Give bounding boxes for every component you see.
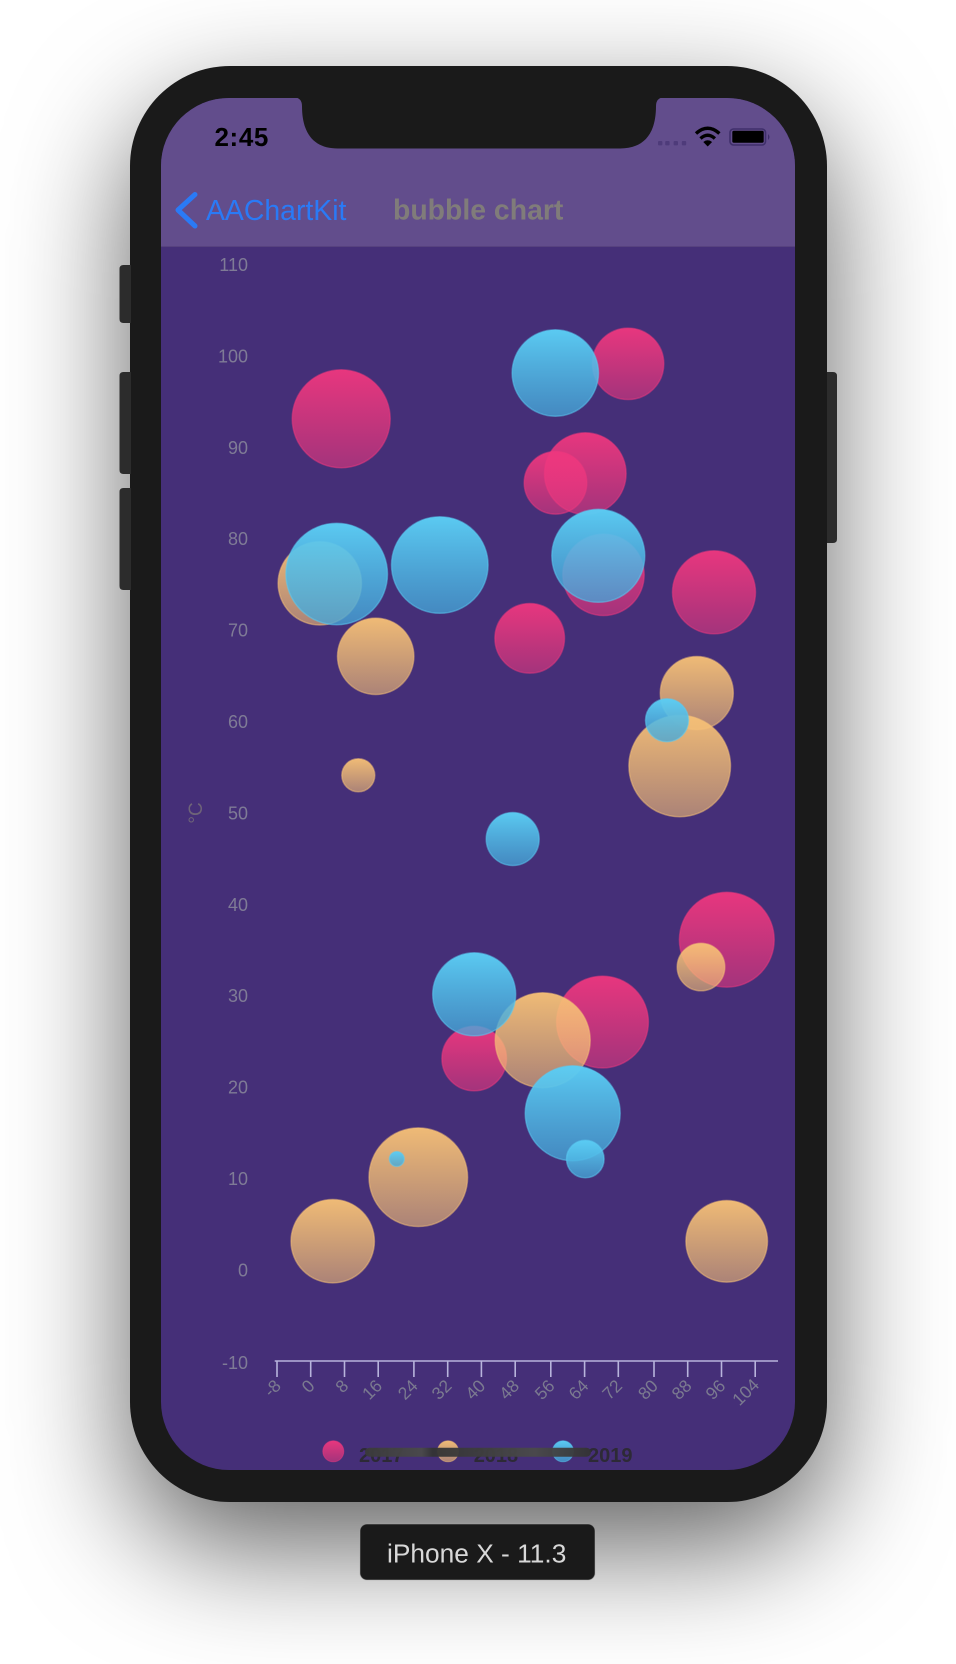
y axis labels: 110: [219, 255, 248, 275]
y axis labels: 100: [218, 346, 248, 366]
y axis labels: [218, 255, 248, 1373]
x axis labels: 32: [428, 1376, 456, 1404]
x axis labels: 72: [598, 1376, 626, 1404]
x axis labels: 96: [701, 1376, 729, 1404]
status time: 2:45: [214, 122, 269, 152]
x axis labels: 56: [531, 1376, 559, 1404]
legend item 2018: 2018: [474, 1445, 518, 1467]
legend item 2018: [438, 1440, 518, 1462]
notch: [294, 97, 664, 148]
x axis labels: 24: [394, 1375, 422, 1404]
bubble series 2017: [292, 328, 774, 1091]
device body with shadow: [130, 66, 827, 1502]
device label: iPhone X - 11.3: [387, 1539, 566, 1569]
y axis labels: 40: [228, 895, 248, 915]
legend item 2019: 2019: [588, 1445, 632, 1467]
back chevron icon: [178, 194, 195, 226]
x axis labels: 104: [728, 1375, 763, 1409]
x axis labels: [268, 1379, 758, 1406]
y axis labels: 20: [228, 1078, 248, 1098]
legend item 2017: 2017: [359, 1445, 404, 1467]
y axis labels: 70: [228, 621, 248, 641]
side buttons: [120, 265, 837, 590]
x axis line and ticks: [275, 1361, 778, 1377]
y axis labels: 60: [228, 712, 248, 732]
icon: wifi: [696, 128, 719, 146]
legend: [322, 1440, 632, 1462]
y axis labels: -10: [222, 1353, 248, 1373]
y axis labels: 90: [228, 438, 248, 458]
x axis labels: 80: [634, 1375, 662, 1404]
x axis labels: 0: [298, 1375, 319, 1397]
x axis labels: 16: [358, 1376, 386, 1404]
y axis labels: 80: [228, 529, 248, 549]
navigation bar: [161, 98, 795, 247]
x axis labels: -8: [260, 1376, 285, 1401]
x axis labels: 8: [331, 1376, 352, 1397]
y axis labels: 30: [228, 986, 248, 1006]
y axis title: °C: [186, 802, 207, 824]
status signal dots: [658, 141, 686, 145]
navigation title: bubble chart: [393, 194, 564, 226]
back button label: AAChartKit: [206, 195, 347, 227]
x axis labels: 88: [668, 1376, 696, 1404]
y axis labels: 0: [238, 1260, 248, 1280]
x axis labels: 40: [461, 1375, 489, 1404]
chart background: [161, 98, 795, 1470]
home indicator: [365, 1448, 591, 1457]
bubble series 2018: [278, 542, 768, 1283]
x axis labels: 64: [565, 1375, 593, 1404]
y axis labels: 10: [228, 1169, 248, 1189]
device label: [360, 1524, 595, 1580]
screen: [161, 98, 795, 1470]
y axis labels: 50: [228, 803, 248, 823]
icon: battery: [730, 129, 770, 145]
x axis labels: 48: [495, 1376, 523, 1404]
legend item 2019: [552, 1440, 632, 1462]
bubble series 2019: [286, 330, 688, 1178]
legend item 2017: [322, 1440, 399, 1462]
